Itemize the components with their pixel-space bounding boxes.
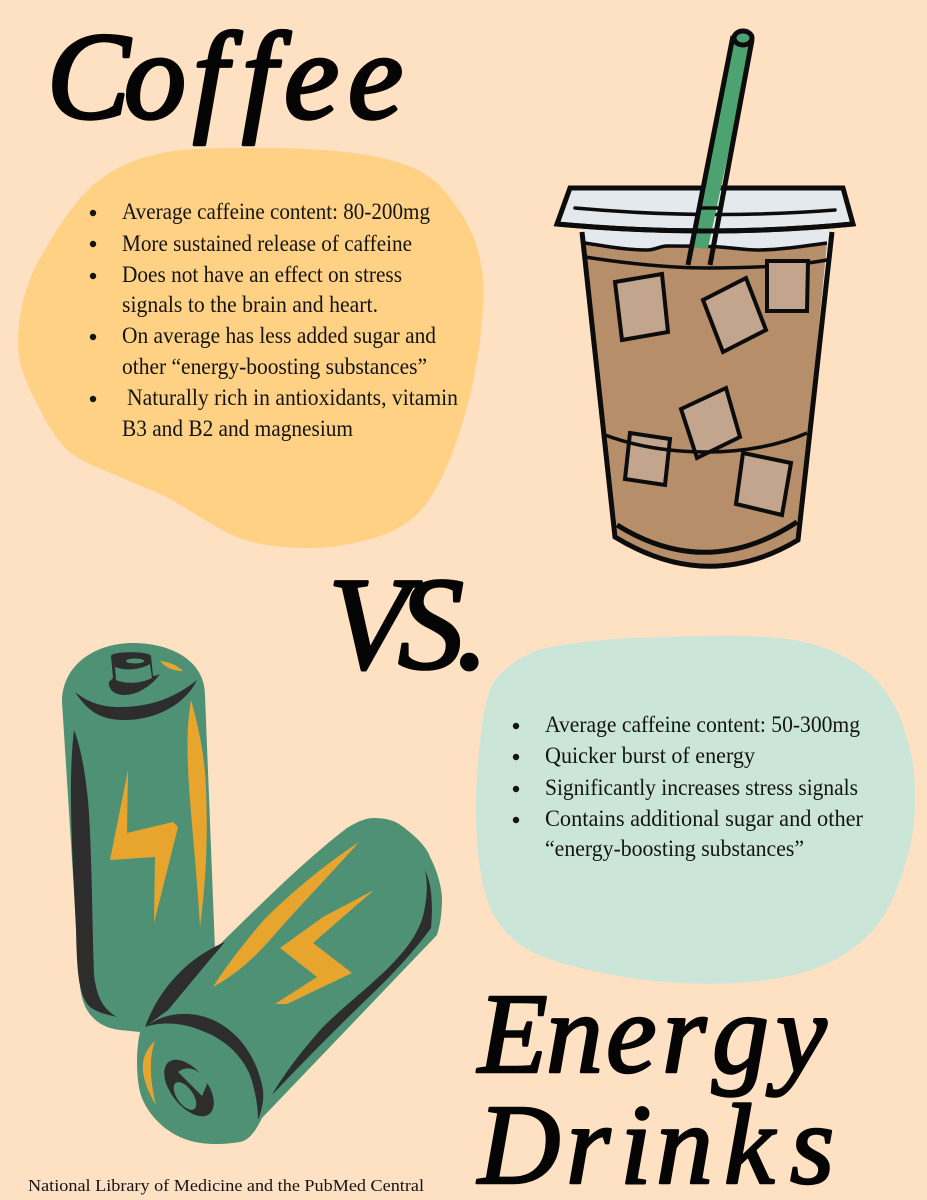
- upright can: [62, 643, 215, 1032]
- panel: coffee facts: Does not have an effect on stress: [122, 262, 402, 287]
- panel: energy drink facts: “energy-boosting substances”: [545, 836, 804, 861]
- coffee liquid: [585, 243, 827, 566]
- title: Coffee: Coffee: [47, 8, 403, 145]
- cup outline: [582, 232, 832, 566]
- panel: energy drink facts: Significantly increases stress signals: [545, 775, 858, 800]
- heading: VS.: VS.: [328, 550, 489, 697]
- icon: energy drink cans: [62, 643, 442, 1144]
- panel: coffee facts: On average has less added sugar and: [122, 323, 436, 348]
- panel: energy drink facts: [476, 636, 915, 984]
- cup body: [582, 230, 832, 566]
- straw: [691, 35, 753, 248]
- cup lid: [557, 188, 853, 231]
- panel: energy drink facts: Average caffeine content: 50-300mg: [545, 712, 860, 737]
- panel: coffee facts: B3 and B2 and magnesium: [122, 416, 353, 441]
- ice cubes: [615, 261, 808, 515]
- tilted can: [137, 818, 442, 1144]
- panel: energy drink facts: Quicker burst of energy: [545, 743, 755, 768]
- panel: coffee facts: More sustained release of caffeine: [122, 231, 412, 256]
- panel: coffee facts: Naturally rich in antioxidants, vitamin: [127, 385, 458, 410]
- panel: energy drink facts: Contains additional sugar and other: [545, 806, 863, 831]
- source credit: National Library of Medicine and the PubMed Central: [28, 1176, 424, 1195]
- panel: coffee facts: signals to the brain and heart.: [122, 292, 378, 317]
- icon: iced coffee cup: [557, 31, 853, 566]
- title: Energy Drinks: Energy: [476, 970, 827, 1097]
- panel: coffee facts: other “energy-boosting substances”: [122, 354, 427, 379]
- title: Energy Drinks: [476, 970, 834, 1200]
- panel: coffee facts: [18, 148, 484, 548]
- panel: coffee facts: Average caffeine content: 80-200mg: [122, 199, 430, 224]
